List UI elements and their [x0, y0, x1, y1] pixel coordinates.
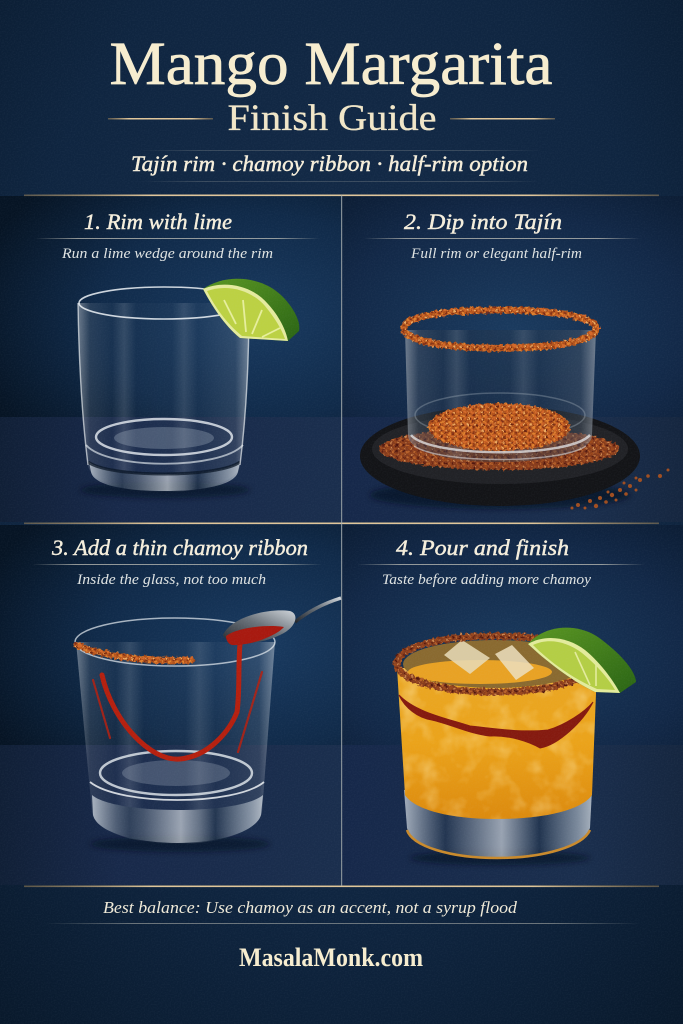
panel: step 4 pour and finish	[342, 525, 683, 885]
panel: step 2 dip into Tajin	[342, 196, 683, 522]
panel: step 1 rim with lime	[0, 196, 341, 522]
header	[108, 31, 555, 176]
Tajin rim	[404, 310, 596, 348]
chamoy swirl	[399, 695, 593, 748]
Tajin rim	[397, 636, 594, 692]
title: Mango Margarita	[110, 31, 552, 98]
footer tip: Best balance: Use chamoy as an accent, not a syrup flood	[103, 898, 518, 917]
step 2 caption: Full rim or elegant half-rim	[410, 246, 582, 262]
finished margarita	[397, 636, 597, 865]
step 1 heading: 1. Rim with lime	[84, 209, 232, 234]
step 3 heading: 3. Add a thin chamoy ribbon	[51, 535, 308, 560]
ice cubes	[444, 640, 490, 674]
Tajin half rim	[77, 645, 191, 660]
step 3 caption: Inside the glass, not too much	[76, 572, 266, 588]
chamoy ribbon	[93, 644, 262, 759]
step 4 caption: Taste before adding more chamoy	[382, 572, 592, 588]
spoon	[223, 598, 341, 645]
glass base	[404, 790, 592, 858]
brand: MasalaMonk.com	[239, 943, 423, 972]
panel dividers	[24, 194, 659, 887]
empty glass	[78, 287, 250, 498]
subtitle: Finish Guide: Finish Guide	[228, 98, 436, 139]
glass with half rim	[75, 598, 341, 852]
step 2 heading: 2. Dip into Tajín	[404, 209, 562, 234]
step 1 caption: Run a lime wedge around the rim	[61, 246, 273, 262]
icon: lime wedge	[203, 279, 299, 341]
panel: step 3 chamoy ribbon	[0, 525, 341, 885]
icon: lime garnish	[528, 628, 636, 693]
scattered Tajin	[570, 468, 670, 510]
tagline: Tajín rim · chamoy ribbon · half-rim option	[131, 151, 528, 176]
black plate with Tajin	[360, 406, 640, 509]
step 4 heading: 4. Pour and finish	[396, 535, 569, 560]
mango liquid	[397, 668, 597, 819]
Tajin pile in glass	[428, 403, 570, 451]
rimmed glass	[404, 310, 596, 462]
